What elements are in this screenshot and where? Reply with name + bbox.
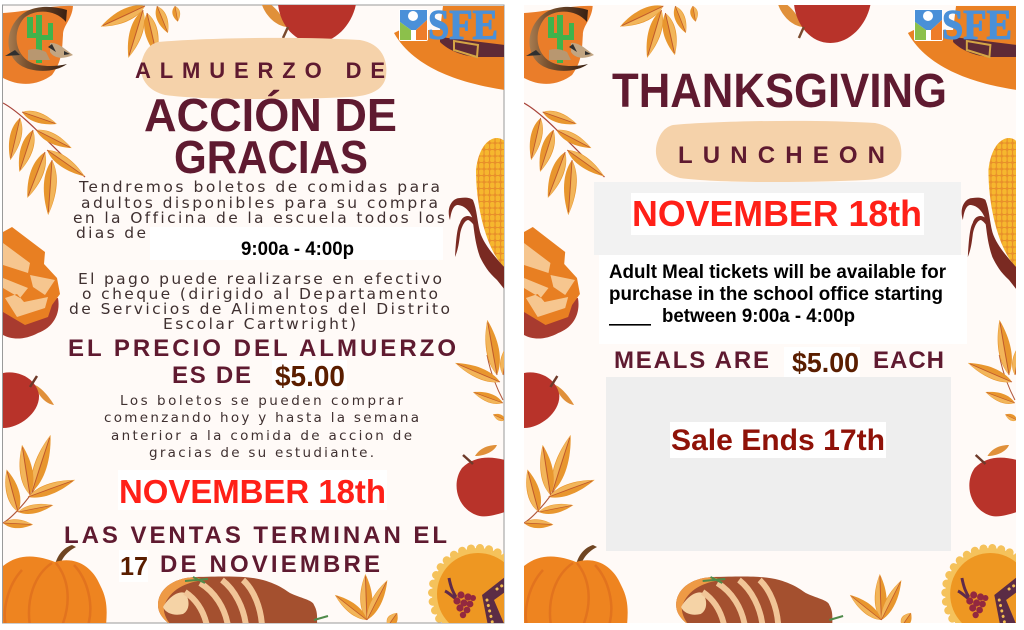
heading: meals price: EACH <box>873 347 944 374</box>
text block: payment: de Servicios de Alimentos del Distrito <box>69 300 450 318</box>
icon: roast turkey <box>158 576 328 626</box>
icon: SFE logo: SFE <box>428 3 498 49</box>
heading: sales end <box>64 522 447 582</box>
icon: right leaves <box>968 320 1016 422</box>
icon: pumpkin <box>524 545 628 626</box>
icon: Cartwright logo <box>526 7 594 71</box>
text block: purchase window: anterior a la comida de accion de <box>111 428 412 444</box>
time box: 9:00a - 4:00p <box>241 239 354 260</box>
flyer background <box>524 5 1016 623</box>
icon: Cartwright logo <box>5 7 73 71</box>
icon: right apple <box>969 445 1017 516</box>
text block: adult meal tickets: between 9:00a - 4:00p <box>662 306 855 327</box>
icon: bottom leaves <box>334 574 398 623</box>
icon: bread <box>524 227 580 339</box>
sale end panel: Sale Ends 17th <box>671 424 885 457</box>
icon: left apple <box>524 372 574 428</box>
text block: ticket availability: adultos disponibles para su compra <box>81 194 438 212</box>
icon: top apple <box>778 4 871 43</box>
icon: corn <box>962 138 1017 290</box>
panel: Spanish flyer <box>0 0 524 630</box>
price box: $5.00 <box>275 361 345 393</box>
icon: bread <box>3 227 60 339</box>
heading: lunch price: ES DE <box>172 362 251 389</box>
heading: lunch price: EL PRECIO DEL ALMUERZO <box>68 335 456 362</box>
text block: ticket availability: en la Officina de la escuela todos los <box>73 209 445 227</box>
icon: leaf branch <box>524 103 607 216</box>
icon: pilgrim hat <box>908 6 1017 90</box>
text block: ticket availability: dias de <box>76 224 146 242</box>
icon: corn <box>449 138 505 290</box>
flyer background <box>2 5 504 623</box>
heading: meals price <box>614 347 944 378</box>
icon: SFE logo: SFE <box>942 3 1012 49</box>
autumn decorations border <box>0 0 524 630</box>
text block: payment: o cheque (dirigido al Departamento <box>82 285 438 303</box>
icon: pilgrim hat <box>394 6 505 90</box>
icon: top leaves <box>620 5 698 58</box>
heading: meals price: MEALS ARE <box>614 347 769 374</box>
icon: bottom leaves <box>850 574 912 623</box>
text block: adult meal tickets: Adult Meal tickets will be available for <box>609 262 947 283</box>
heading: Luncheon: LUNCHEON <box>678 142 885 169</box>
text block: purchase window: comenzando hoy y hasta la semana <box>104 410 419 426</box>
date panel <box>594 182 961 255</box>
icon: orange leaf blob <box>524 6 593 84</box>
heading: Thanksgiving: THANKSGIVING <box>612 65 947 118</box>
panel: English flyer <box>521 0 1024 630</box>
heading: Accion de Gracias <box>144 89 397 183</box>
icon: left apple <box>3 372 54 428</box>
icon: SFE logo <box>914 3 1012 49</box>
text block: payment <box>69 270 450 333</box>
icon: right leaves <box>455 320 504 422</box>
text block: payment: El pago puede realizarse en efectivo <box>78 270 442 288</box>
sale end panel <box>606 377 951 551</box>
heading: lunch price <box>68 335 456 389</box>
text block: purchase window <box>104 393 419 461</box>
heading: sales end: 17 <box>120 551 148 581</box>
icon: pumpkin <box>3 545 107 626</box>
time box <box>150 227 443 260</box>
text block: adult meal tickets: purchase in the school office starting <box>609 284 943 305</box>
text block: ticket availability: Tendremos boletos de comidas para <box>78 178 440 196</box>
heading: meals price: $5.00 <box>792 347 859 378</box>
icon: top leaves <box>100 5 180 58</box>
icon: lower left leaves <box>521 433 596 529</box>
text block: purchase window: gracias de su estudiante. <box>149 445 374 461</box>
text block: payment: Escolar Cartwright) <box>163 315 356 333</box>
text block: ticket availability <box>73 178 445 242</box>
date panel: NOVEMBER 18th <box>632 193 922 234</box>
heading: Accion de Gracias: GRACIAS <box>174 131 368 183</box>
icon: leaf branch <box>3 103 88 216</box>
text block: adult meal tickets <box>599 255 967 344</box>
icon: SFE logo <box>399 3 498 49</box>
icon: right apple <box>457 445 505 516</box>
heading backdrop: peach brush stroke <box>656 121 901 182</box>
icon: roast turkey <box>676 576 843 626</box>
autumn decorations border <box>521 0 1024 630</box>
heading backdrop: peach brush stroke <box>141 38 386 99</box>
date box: November 18th: NOVEMBER 18th <box>119 473 386 510</box>
heading: Almuerzo de: ALMUERZO DE <box>135 58 385 83</box>
icon: lower left leaves <box>0 433 77 529</box>
icon: top apple <box>262 5 356 39</box>
heading: Accion de Gracias: ACCIÓN DE <box>144 89 397 141</box>
heading: sales end: LAS VENTAS TERMINAN EL <box>64 522 447 549</box>
heading: sales end: DE NOVIEMBRE <box>160 551 380 578</box>
icon: pie <box>945 548 1024 630</box>
icon: orange leaf blob <box>3 6 73 84</box>
icon: pie <box>428 544 504 623</box>
text block: purchase window: Los boletos se pueden comprar <box>120 393 403 409</box>
